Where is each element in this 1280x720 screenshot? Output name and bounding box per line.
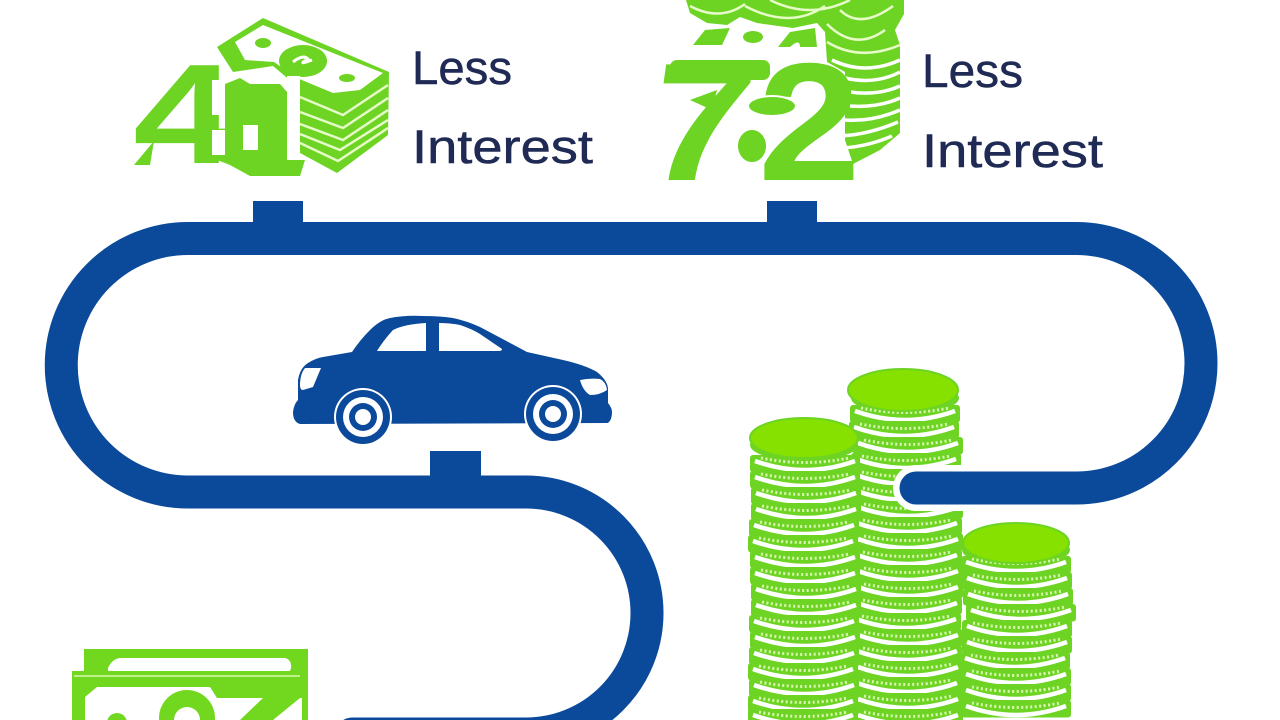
left coin stack bbox=[748, 418, 861, 720]
text: Less Interest right: Less bbox=[922, 44, 1023, 97]
number 4: 4 bbox=[133, 35, 237, 194]
coin pile bbox=[686, 0, 904, 164]
icon: car bbox=[293, 316, 612, 446]
number 72 bbox=[637, 28, 861, 216]
text: Less Interest left bbox=[412, 41, 593, 173]
road: winding track bbox=[61, 201, 1201, 720]
second digit block bbox=[212, 76, 305, 176]
icon: coin stacks bbox=[748, 369, 1076, 720]
text: Less Interest left: Less bbox=[412, 41, 512, 94]
number 72: 2 bbox=[758, 29, 861, 216]
middle coin stack bbox=[848, 369, 963, 720]
text: Less Interest right bbox=[922, 44, 1103, 177]
icon: coin pile with number 72 bbox=[637, 0, 904, 216]
text: Less Interest right: Interest bbox=[922, 124, 1103, 177]
text: Less Interest left: Interest bbox=[412, 120, 593, 173]
banknote stack bbox=[217, 18, 389, 173]
icon: banknote bottom left bbox=[72, 649, 308, 720]
icon: cash stack with number 4 bbox=[133, 18, 389, 194]
number 72: 7 bbox=[637, 28, 766, 216]
right coin stack bbox=[960, 523, 1076, 718]
